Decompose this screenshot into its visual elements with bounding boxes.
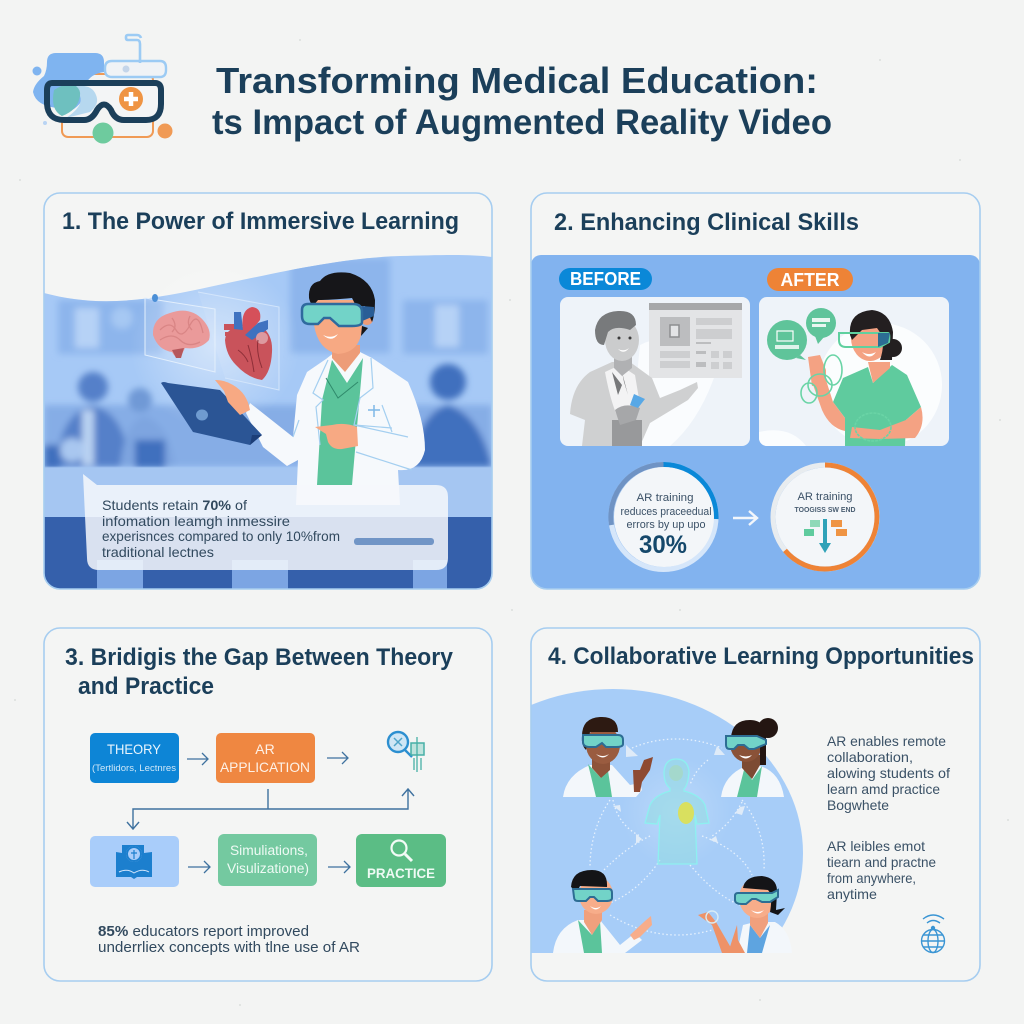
arms (812, 380, 845, 431)
pointing hand on coat (315, 424, 358, 449)
callout: retention statistic: experisnces compared to only 10%from (102, 528, 340, 544)
floating bubble: notes (806, 308, 836, 344)
stat ring: 30 percent fewer errors: errors by up upo (626, 519, 706, 531)
badge: after (767, 268, 853, 291)
illustration: after, nurse using AR (759, 297, 949, 447)
dotted connection arcs (590, 739, 764, 935)
text: remote collaboration: AR enables remote (827, 733, 946, 749)
person: top left student (563, 717, 653, 797)
heading: panel 2: 2. Enhancing Clinical Skills (554, 209, 859, 236)
head (851, 328, 883, 361)
white coat body (246, 352, 425, 505)
tablet (161, 382, 262, 445)
box: simulations (218, 834, 317, 886)
AR rings (801, 355, 891, 441)
hologram: human body (621, 757, 731, 867)
box: simulations: Visulizatione) (227, 861, 309, 876)
box: AR application: AR (255, 741, 275, 757)
stat ring: 30 percent fewer errors: AR training (636, 492, 694, 504)
illustration: doctor wearing AR goggles (161, 272, 425, 505)
raised pointing hand (215, 380, 250, 415)
box: theory (90, 733, 179, 783)
grey doctor (570, 311, 698, 446)
scrubs (833, 365, 921, 446)
title: ts Impact of Augmented Reality Video (212, 103, 832, 142)
stat ring: 30 percent fewer errors: reduces praceedual (620, 506, 712, 518)
stat ring: 30 percent fewer errors (608, 462, 718, 572)
callout: retention statistic (83, 474, 448, 570)
text: remote collaboration: learn amd practice (827, 781, 940, 797)
slide screen (649, 303, 742, 378)
logo: AR goggles icon (32, 35, 172, 144)
arrow (327, 752, 348, 764)
text: remote collaboration: Bogwhete (827, 797, 889, 813)
heading: panel 4: 4. Collaborative Learning Opportunities (548, 643, 974, 670)
heading: panel 1: 1. The Power of Immersive Learning (62, 208, 459, 235)
goggles (839, 333, 889, 347)
text: remote collaboration: collaboration, (827, 749, 913, 765)
scrubs (317, 358, 363, 485)
heading: panel 3: and Practice (78, 673, 214, 700)
arrow: before to after (733, 511, 757, 525)
title (212, 60, 832, 142)
box: practice: PRACTICE (367, 865, 435, 881)
heading: panel 3 (65, 644, 454, 700)
text: remote collaboration: alowing students of (827, 765, 950, 781)
person: bottom right student (698, 876, 792, 953)
box: practice (356, 834, 446, 887)
hair (309, 272, 375, 322)
panel 4: collaborative learning opportunities (530, 627, 981, 982)
heading: panel 3: 3. Bridigis the Gap Between Theory (65, 644, 454, 671)
badge: after: AFTER (780, 270, 840, 290)
text: learn from anywhere: AR leibles emot (827, 838, 925, 854)
coat lapels and lines (293, 358, 412, 470)
head (314, 300, 362, 354)
statistic text: underrliex concepts with tlne use of AR (98, 940, 360, 956)
background circle (532, 689, 803, 953)
text: learn from anywhere: anytime (827, 886, 877, 902)
stat ring: after (773, 465, 877, 569)
box: book icon (90, 836, 179, 887)
box: AR application (216, 733, 315, 783)
callout: retention statistic: traditional lectnes (102, 544, 214, 560)
icon: globe with wifi (922, 915, 944, 952)
arrow (328, 861, 350, 873)
person: top right student (721, 718, 784, 797)
text: learn from anywhere: tiearn and practne (827, 854, 936, 870)
arrow (188, 861, 210, 873)
neck (332, 345, 360, 372)
person: bottom left student (553, 870, 652, 953)
title: Transforming Medical Education: (216, 60, 818, 101)
icon: anatomical heart (224, 307, 272, 380)
stat ring: 30 percent fewer errors: 30% (639, 531, 687, 559)
text: learn from anywhere: from anywhere, (827, 870, 916, 886)
callout: retention statistic: infomation leamgh inmessire (102, 513, 290, 529)
panel 2: enhancing clinical skills (531, 193, 980, 589)
box: theory: (Tertlidors, Lectnres (92, 763, 177, 773)
holographic display: brain and heart (130, 260, 300, 430)
stat ring: after: TOOGISS SW END (794, 505, 856, 514)
AR goggles (360, 306, 374, 322)
box: simulations: Simuliations, (230, 843, 308, 858)
badge: before: BEFORE (570, 269, 641, 289)
classroom background (44, 250, 492, 590)
arrowheads (613, 745, 745, 844)
stat ring: after: AR training (798, 491, 852, 503)
smile (323, 334, 338, 339)
text: learn from anywhere (827, 838, 936, 902)
connector: branching arrows (127, 789, 414, 829)
statistic text (98, 924, 360, 956)
box: AR application: APPLICATION (220, 759, 310, 775)
arrow (187, 753, 208, 765)
floating bubble: model (767, 320, 807, 360)
panel 3: bridging the gap between theory and practice (44, 628, 492, 981)
callout: retention statistic: Students retain 70% of (102, 497, 247, 513)
text: remote collaboration (827, 733, 950, 813)
icon: brain (153, 311, 210, 358)
statistic text: 85% educators report improved (98, 924, 309, 940)
icon: down arrow with blocks (804, 519, 847, 553)
icon: magnifier with anatomy (388, 732, 424, 772)
illustration: before, doctor with static slides (560, 297, 750, 446)
box: theory: THEORY (107, 741, 162, 757)
panel 1: the power of immersive learning (44, 193, 492, 590)
